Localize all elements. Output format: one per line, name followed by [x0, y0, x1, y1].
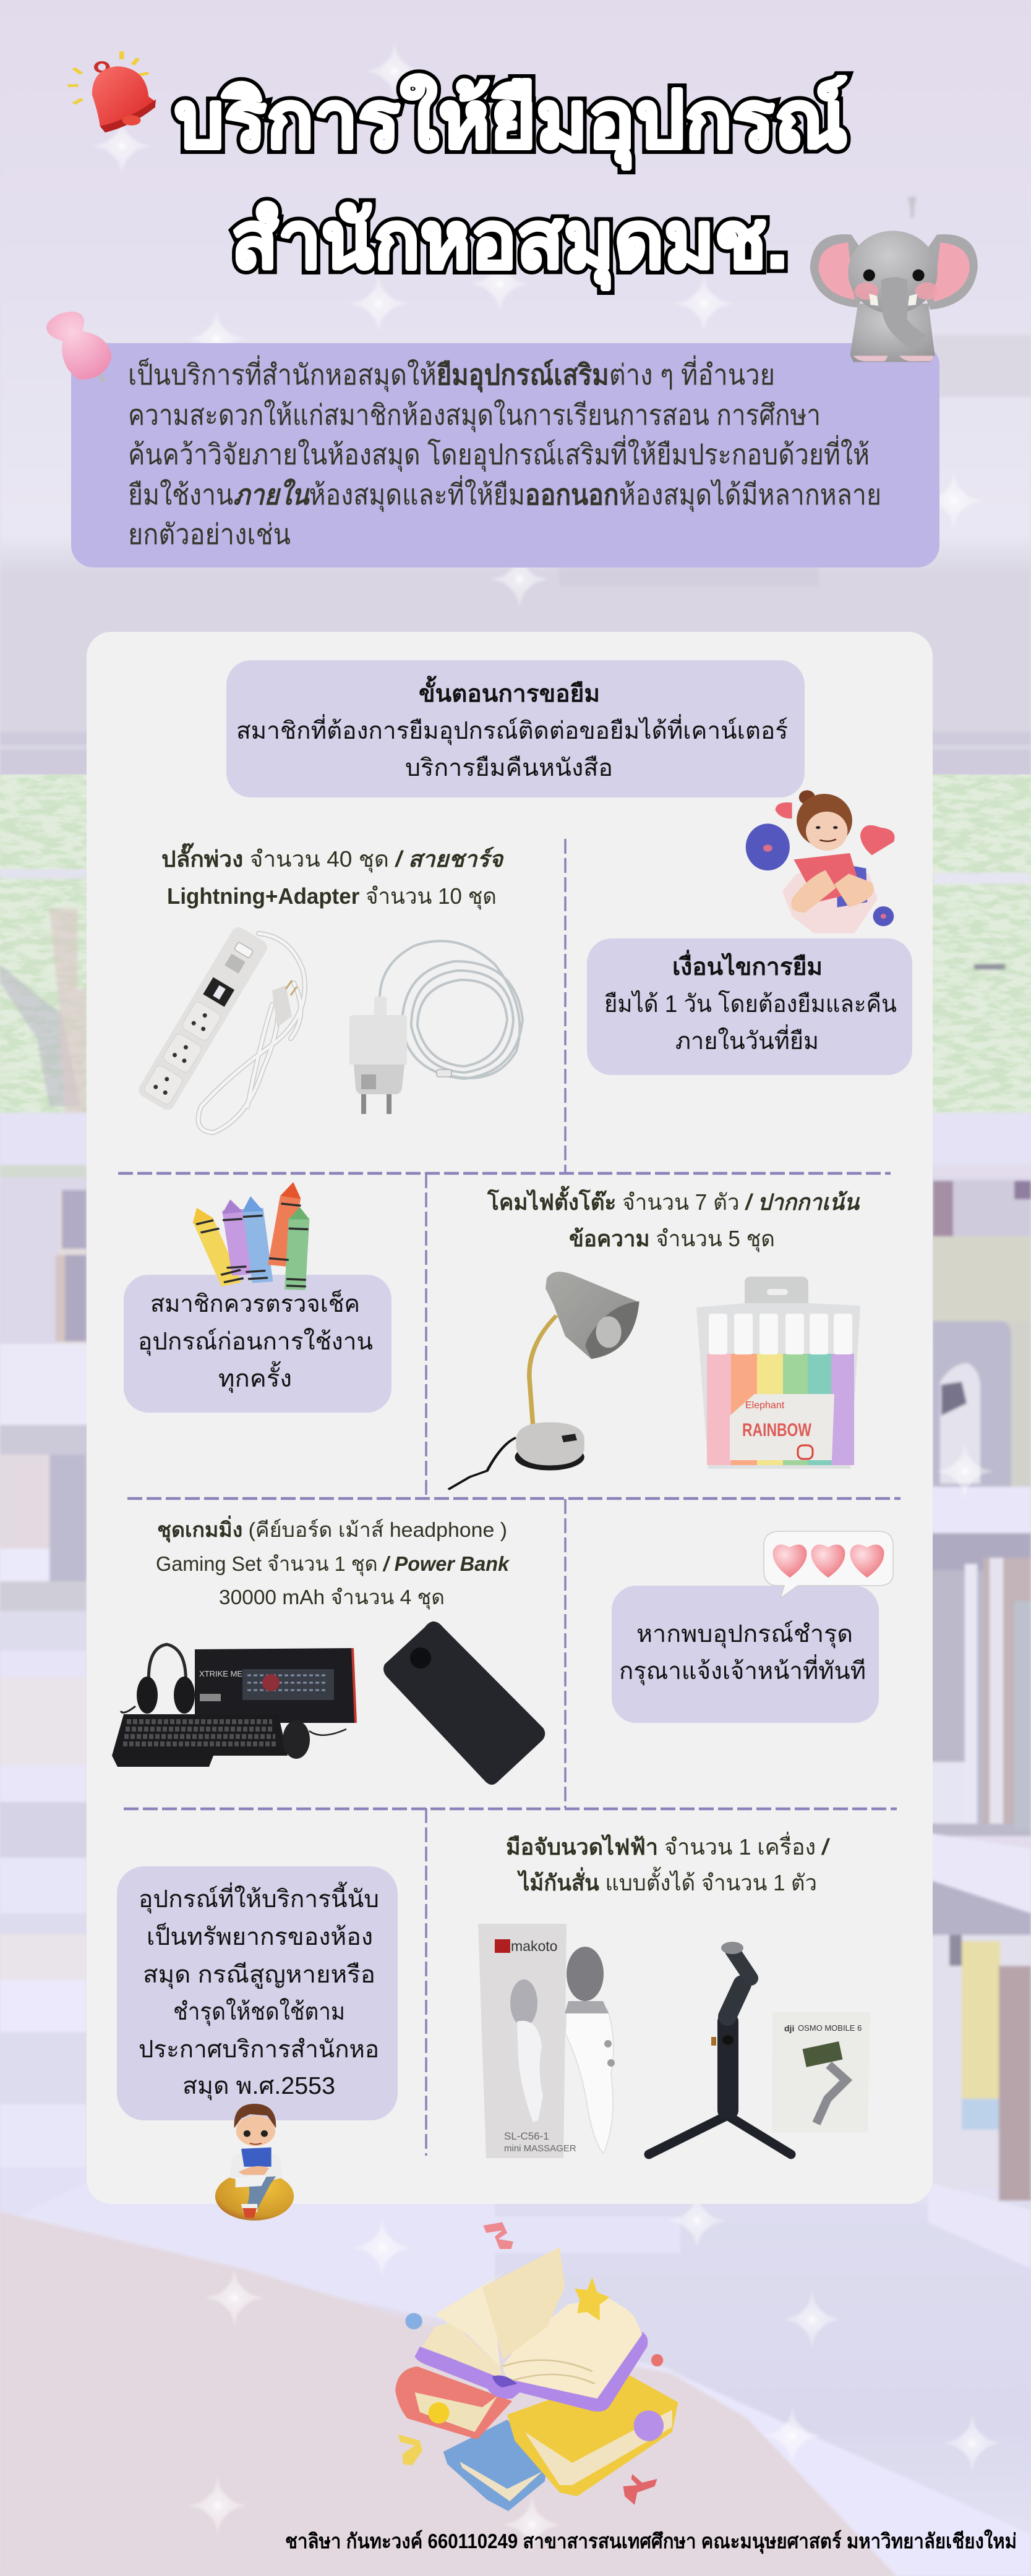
icon: crayons	[192, 1182, 309, 1290]
icon: speech bubble with hearts	[764, 1531, 893, 1598]
item 1 caption: power strip and charger: Lightning+Adapter จำนวน 10 ชุด	[167, 883, 497, 910]
intro text: ค้นคว้าวิจัยภายในห้องสมุด โดยอุปกรณ์เสริมที่ให้ยืมประกอบด้วยที่ให้	[128, 435, 870, 472]
image: pastel highlighter set: RAINBOW	[742, 1420, 812, 1440]
dashed grid dividers	[118, 839, 901, 2156]
item 1 caption: power strip and charger: ปลั๊กพ่วง จำนวน 40 ชุด / สายชาร์จ	[161, 842, 504, 873]
title: สำนักหอสมุดมช.	[231, 197, 788, 290]
item 2 caption: lamp and highlighters	[487, 1186, 860, 1252]
image: desk lamp	[448, 1272, 640, 1489]
intro text: ยกตัวอย่างเช่น	[128, 518, 291, 550]
item 2 caption: lamp and highlighters: ข้อความ จำนวน 5 ชุด	[569, 1226, 775, 1252]
title	[174, 75, 847, 290]
image: pastel highlighter set	[696, 1277, 860, 1469]
image: gimbal stabilizer with box	[649, 1942, 870, 2154]
item 1 caption: power strip and charger	[161, 842, 504, 910]
box: borrowing conditions: เงื่อนไขการยืม	[672, 950, 823, 980]
box: loss and damage policy	[117, 1866, 398, 2120]
box: report damage: หากพบอุปกรณ์ชำรุด	[636, 1620, 853, 1649]
title: บริการให้ยืมอุปกรณ์	[174, 75, 847, 169]
image: gaming set: XTRIKE ME	[199, 1669, 242, 1678]
panel: main content card	[87, 632, 933, 2221]
image: electric massager with box: mini MASSAGER	[504, 2143, 576, 2154]
intro text: ยืมใช้งานภายในห้องสมุดและที่ให้ยืมออกนอกห้องสมุดได้มีหลากหลาย	[128, 475, 881, 512]
box: inspect equipment: ทุกครั้ง	[218, 1361, 292, 1393]
box: borrowing conditions: ภายในวันที่ยืม	[675, 1024, 819, 1055]
item 3 caption: gaming set and power bank: 30000 mAh จำนวน 4 ชุด	[219, 1586, 445, 1610]
panel: introduction	[71, 343, 939, 567]
image: power strip	[136, 925, 305, 1133]
icon: stack of colourful books	[395, 2222, 678, 2511]
box: borrowing steps	[226, 660, 805, 797]
box: inspect equipment	[124, 1275, 391, 1413]
title: สำนักหอสมุดมช.	[231, 197, 788, 290]
box: loss and damage policy: ประกาศบริการสำนักหอ	[139, 2036, 379, 2063]
box: loss and damage policy: สมุด พ.ศ.2553	[182, 2073, 335, 2101]
item 4 caption: massager and gimbal: มือจับนวดไฟฟ้า จำนวน 1 เครื่อง /	[506, 1832, 831, 1860]
box: borrowing steps: บริการยืมคืนหนังสือ	[405, 755, 613, 781]
image: electric massager with box: makoto	[511, 1938, 557, 1954]
icon: pink push pin	[46, 312, 112, 382]
title: บริการให้ยืมอุปกรณ์	[174, 75, 847, 169]
icon: elephant	[810, 231, 978, 362]
icon: boy reading on beanbag	[215, 2104, 294, 2221]
box: inspect equipment: อุปกรณ์ก่อนการใช้งาน	[138, 1328, 373, 1356]
box: borrowing steps: ขั้นตอนการขอยืม	[419, 676, 600, 707]
image: electric massager with box: SL-C56-1	[504, 2130, 549, 2142]
box: report damage: กรุณาแจ้งเจ้าหน้าที่ทันที	[619, 1654, 866, 1686]
box: loss and damage policy: ชำรุดให้ชดใช้ตาม	[173, 1998, 345, 2026]
intro text: ความสะดวกให้แก่สมาชิกห้องสมุดในการเรียนการสอน การศึกษา	[128, 399, 821, 433]
box: borrowing conditions: ยืมได้ 1 วัน โดยต้องยืมและคืน	[604, 990, 897, 1018]
image: pastel highlighter set: Elephant	[745, 1400, 785, 1411]
item 2 caption: lamp and highlighters: โคมไฟตั้งโต๊ะ จำนวน 7 ตัว / ปากกาเน้น	[487, 1186, 860, 1215]
image: power bank	[383, 1622, 545, 1785]
box: borrowing conditions	[587, 938, 912, 1075]
icon: red bell	[67, 51, 156, 132]
image: gimbal stabilizer with box: dji	[784, 2023, 794, 2033]
intro text: เป็นบริการที่สำนักหอสมุดให้ยืมอุปกรณ์เสริมต่าง ๆ ที่อำนวย	[128, 355, 775, 393]
image: electric massager with box	[478, 1924, 615, 2158]
box: loss and damage policy: สมุด กรณีสูญหายหรือ	[143, 1962, 375, 1989]
image: USB charger with cable	[349, 941, 523, 1114]
box: loss and damage policy: อุปกรณ์ที่ให้บริการนี้นับ	[139, 1881, 379, 1914]
item 3 caption: gaming set and power bank: ชุดเกมมิ่ง (คีย์บอร์ด เม้าส์ headphone )	[157, 1515, 507, 1543]
image: gimbal stabilizer with box: OSMO MOBILE 6	[798, 2023, 862, 2033]
box: report damage	[612, 1586, 879, 1723]
icon: woman hugging books with hearts	[746, 790, 894, 933]
item 4 caption: massager and gimbal: ไม้กันสั่น แบบตั้งได้ จำนวน 1 ตัว	[516, 1866, 817, 1895]
item 4 caption: massager and gimbal	[506, 1832, 831, 1895]
box: inspect equipment: สมาชิกควรตรวจเช็ค	[150, 1289, 360, 1317]
box: borrowing steps: สมาชิกที่ต้องการยืมอุปกรณ์ติดต่อขอยืมได้ที่เคาน์เตอร์	[236, 714, 788, 746]
item 3 caption: gaming set and power bank: Gaming Set จำนวน 1 ชุด / Power Bank	[156, 1552, 510, 1576]
box: loss and damage policy: เป็นทรัพยากรของห้อง	[147, 1922, 373, 1950]
item 3 caption: gaming set and power bank	[156, 1515, 510, 1610]
intro text	[128, 355, 881, 550]
image: gaming set	[112, 1644, 356, 1767]
